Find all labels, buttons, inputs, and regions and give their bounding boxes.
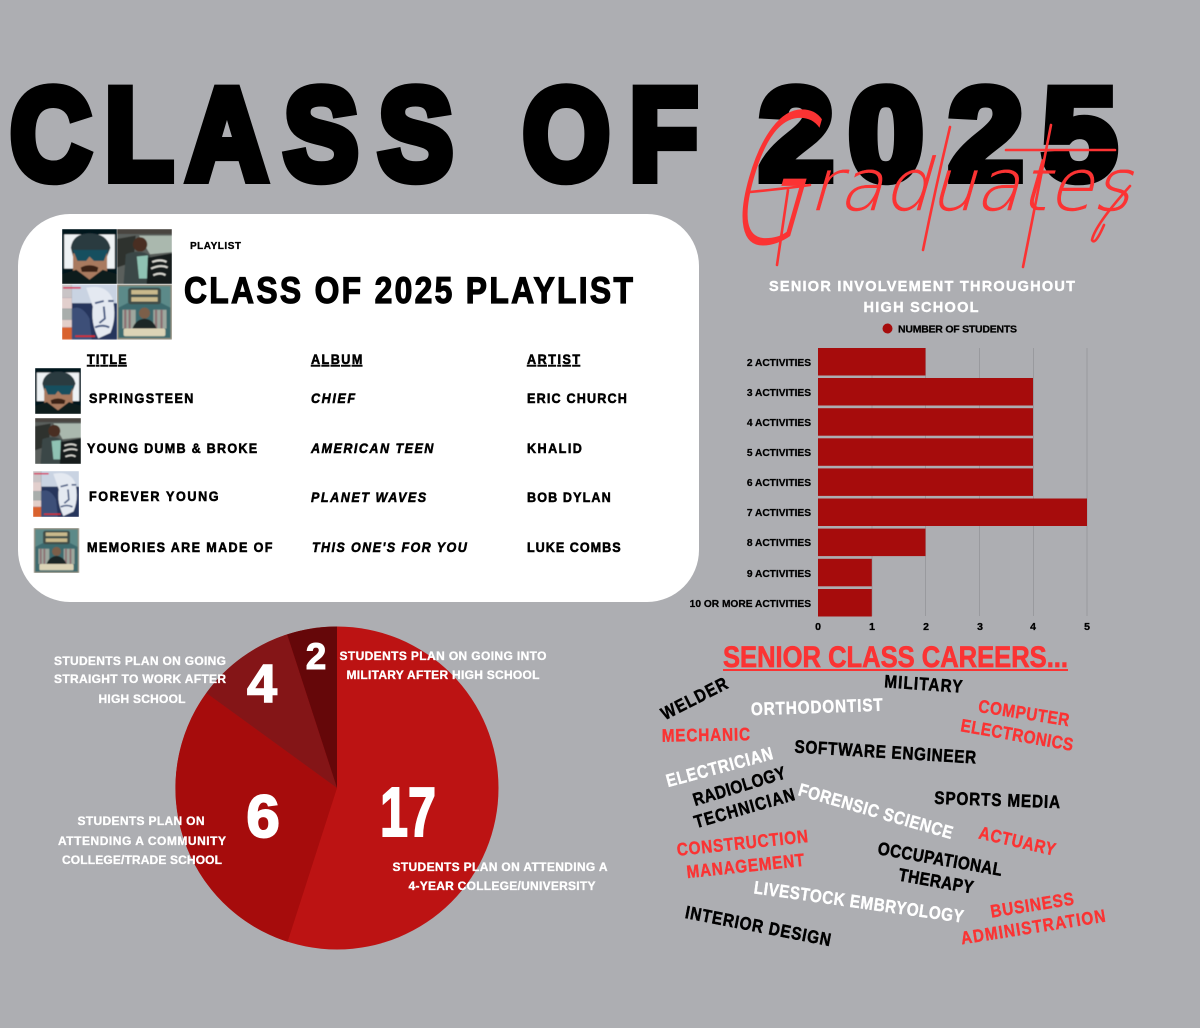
bar chart: activities: 10 OR MORE ACTIVITIES xyxy=(690,599,811,610)
bar chart: activities xyxy=(690,348,1090,633)
pie chart: plans after graduation xyxy=(175,626,498,950)
bar chart: activities: 1 xyxy=(869,621,875,633)
career word cloud: ELECTRICIAN xyxy=(664,743,775,791)
row 4: MEMORIES ARE MADE OF xyxy=(87,539,272,555)
career word cloud: ACTUARY xyxy=(977,822,1058,860)
bar chart: activities: 3 ACTIVITIES xyxy=(747,388,811,399)
career word cloud: RADIOLOGY xyxy=(690,763,788,810)
label: community college xyxy=(58,814,226,867)
row 1: ERIC CHURCH xyxy=(527,390,627,406)
career word cloud: WELDER xyxy=(657,673,731,724)
row 1: CHIEF xyxy=(311,390,356,406)
career word cloud: BUSINESS xyxy=(989,888,1075,922)
row 3: PLANET WAVES xyxy=(311,489,426,505)
career word cloud: THERAPY xyxy=(897,865,975,898)
label: straight to work: HIGH SCHOOL xyxy=(98,692,186,706)
label: military: MILITARY AFTER HIGH SCHOOL xyxy=(346,668,540,682)
row 3 xyxy=(33,471,611,517)
playlist label: PLAYLIST xyxy=(190,241,241,252)
bar chart: activities: 5 xyxy=(1084,621,1090,633)
career word cloud: FORENSIC SCIENCE xyxy=(796,779,955,843)
career word cloud: ORTHODONTIST xyxy=(751,695,884,720)
row 4: THIS ONE'S FOR YOU xyxy=(312,539,467,555)
bar chart: activities: 0 xyxy=(815,621,821,633)
bar chart: activities: 8 ACTIVITIES xyxy=(747,538,811,549)
label: community college: STUDENTS PLAN ON xyxy=(78,814,204,828)
bar chart: activities: 9 ACTIVITIES xyxy=(747,569,811,580)
label: military xyxy=(340,649,546,682)
script word: Graduates xyxy=(710,77,1149,286)
title: CLASSOF xyxy=(10,61,698,207)
label: military: STUDENTS PLAN ON GOING INTO xyxy=(340,649,546,663)
label: straight to work: STRAIGHT TO WORK AFTER xyxy=(54,672,226,686)
career word cloud: MECHANIC xyxy=(662,724,750,746)
row 2: YOUNG DUMB & BROKE xyxy=(87,440,257,456)
pie value 2: 2 xyxy=(306,636,326,677)
playlist heading: CLASS OF 2025 PLAYLIST xyxy=(184,271,633,312)
column header: artist: ARTIST xyxy=(527,351,580,367)
chart subtitle: HIGH SCHOOL xyxy=(864,300,979,316)
label: straight to work xyxy=(54,654,226,706)
title: 2025 xyxy=(759,62,1117,207)
chart title: SENIOR INVOLVEMENT THROUGHOUT xyxy=(769,279,1075,295)
careers heading: SENIOR CLASS CAREERS... xyxy=(723,641,1068,674)
row 1: SPRINGSTEEN xyxy=(89,390,193,406)
career word cloud: SOFTWARE ENGINEER xyxy=(794,736,977,768)
pie value 4: 4 xyxy=(247,654,277,714)
career word cloud: LIVESTOCK EMBRYOLOGY xyxy=(753,877,965,927)
label: four-year college: STUDENTS PLAN ON ATTENDING A xyxy=(392,860,608,874)
row 3: BOB DYLAN xyxy=(527,489,611,505)
script word: Graduates: G xyxy=(710,77,846,286)
career word cloud: OCCUPATIONAL xyxy=(876,838,1004,880)
bar chart: activities: 7 ACTIVITIES xyxy=(747,508,811,519)
column header: album: ALBUM xyxy=(311,351,362,367)
script word: Graduates: raduates xyxy=(803,144,1149,228)
column header: title: TITLE xyxy=(87,351,127,367)
pie value 6: 6 xyxy=(246,783,280,850)
row 1 xyxy=(35,368,627,414)
career word cloud xyxy=(657,671,1107,950)
label: community college: ATTENDING A COMMUNITY xyxy=(58,834,226,848)
bar chart: activities: 4 xyxy=(1030,621,1036,633)
label: four-year college xyxy=(392,860,608,893)
bar chart: activities: 2 xyxy=(923,621,929,633)
title xyxy=(10,61,1117,207)
row 3: FOREVER YOUNG xyxy=(89,488,219,504)
career word cloud: ELECTRONICS xyxy=(959,715,1075,755)
row 4: LUKE COMBS xyxy=(527,539,621,555)
career word cloud: ADMINISTRATION xyxy=(959,906,1107,949)
bar chart: activities: 2 ACTIVITIES xyxy=(747,358,811,369)
career word cloud: COMPUTER xyxy=(977,696,1071,730)
album collage xyxy=(62,229,172,340)
row 4 xyxy=(34,528,621,573)
career word cloud: MILITARY xyxy=(884,671,963,697)
label: four-year college: 4-YEAR COLLEGE/UNIVERSITY xyxy=(408,879,596,893)
career word cloud: INTERIOR DESIGN xyxy=(684,902,833,950)
career word cloud: MANAGEMENT xyxy=(686,850,806,882)
bar chart: activities: 6 ACTIVITIES xyxy=(747,478,811,489)
pie value 17: 17 xyxy=(380,773,436,851)
bar chart: activities: 3 xyxy=(977,621,983,633)
panel: playlist xyxy=(18,214,699,602)
row 2: AMERICAN TEEN xyxy=(310,440,434,456)
chart legend: NUMBER OF STUDENTS xyxy=(898,324,1017,336)
row 2: KHALID xyxy=(527,440,582,456)
career word cloud: SPORTS MEDIA xyxy=(934,788,1060,813)
career word cloud: TECHNICIAN xyxy=(692,784,797,832)
row 2 xyxy=(35,418,582,464)
career word cloud: CONSTRUCTION xyxy=(676,826,809,860)
bar chart: activities: 4 ACTIVITIES xyxy=(747,418,811,429)
label: community college: COLLEGE/TRADE SCHOOL xyxy=(62,853,222,867)
label: straight to work: STUDENTS PLAN ON GOING xyxy=(54,654,226,668)
bar chart: activities: 5 ACTIVITIES xyxy=(747,448,811,459)
